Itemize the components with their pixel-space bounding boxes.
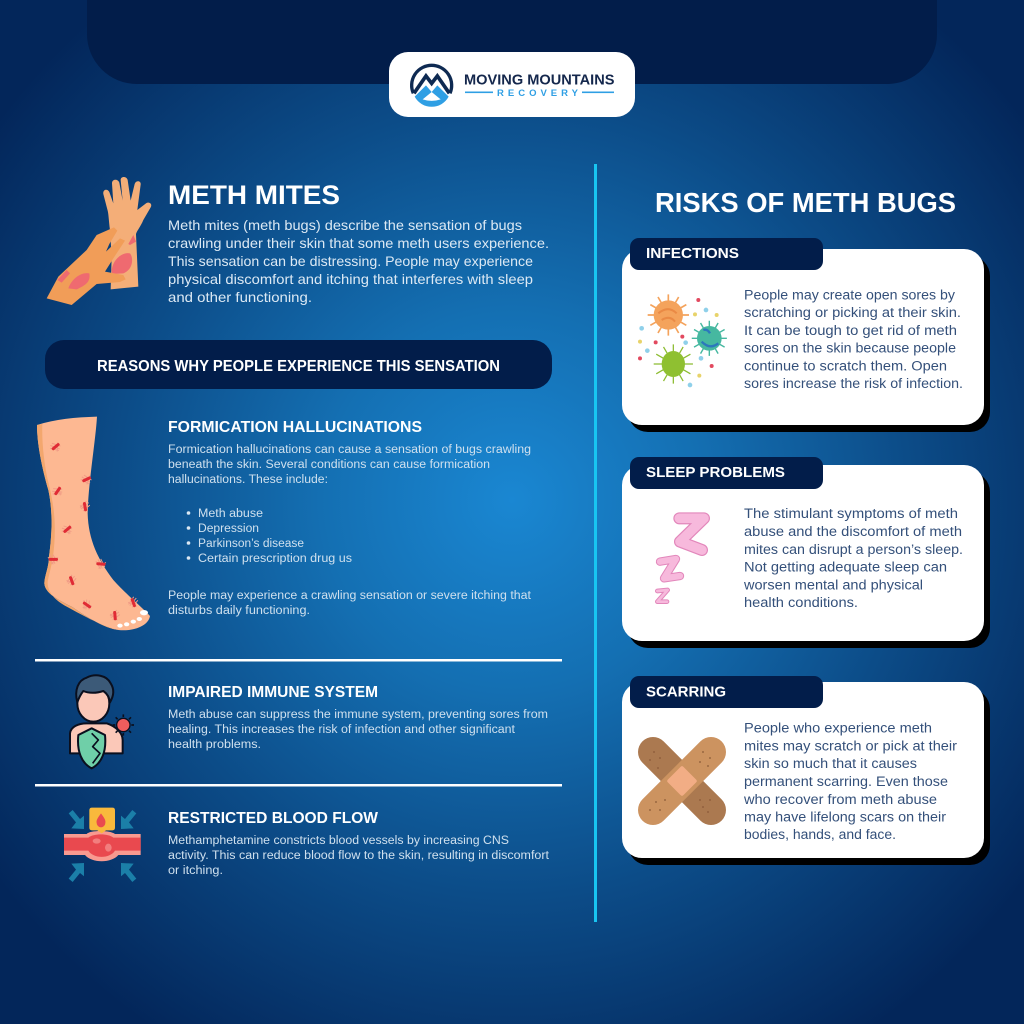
logo wordmark (464, 72, 614, 99)
section: restricted blood flow: activity. This can reduce blood flow to the skin, resulting in discomfort (168, 850, 550, 862)
intro text block: physical discomfort and itching that interferes with sleep (168, 271, 533, 287)
section: impaired immune system: healing. This increases the risk of infection and other significant (168, 724, 516, 736)
panel: sleep problems: SLEEP PROBLEMS (646, 464, 785, 481)
intro text block: and other functioning. (168, 289, 312, 305)
panel: infections (622, 238, 990, 432)
panel: scarring: bodies, hands, and face. (744, 827, 896, 842)
panel: scarring: may have lifelong scars on their (744, 810, 947, 824)
bullet list: Meth abuse (198, 508, 263, 520)
section: restricted blood flow: or itching. (168, 865, 223, 877)
section: formication: beneath the skin. Several conditions can cause formication (168, 459, 490, 471)
panel: infections: People may create open sores by (744, 288, 955, 302)
section: impaired immune system: Meth abuse can suppress the immune system, preventing sores from (168, 709, 548, 721)
panel: scarring: mites may scratch or pick at their (744, 738, 958, 754)
panel: sleep problems (622, 457, 990, 648)
intro text block: crawling under their skin that some meth users experience. (168, 235, 549, 251)
panel: infections: sores on the skin because people (744, 340, 956, 356)
panel: sleep problems: Not getting adequate sleep can (744, 560, 947, 574)
icon: mountain logo (412, 65, 452, 107)
icon: leg with bugs (37, 417, 150, 630)
icon: blood vessel (64, 808, 141, 882)
logo wordmark: RECOVERY (497, 88, 579, 99)
panel: scarring: People who experience meth (744, 720, 932, 736)
section: formication: People may experience a crawling sensation or severe itching that (168, 590, 532, 602)
header tab (87, 0, 937, 84)
panel: sleep problems: abuse and the discomfort of meth (744, 524, 962, 539)
panel: infections: scratching or picking at their skin. (744, 305, 961, 320)
section: formication: hallucinations. These include: (168, 474, 328, 486)
panel: infections: INFECTIONS (646, 245, 739, 262)
panel: scarring: skin so much that it causes (744, 756, 917, 771)
intro text block: This sensation can be distressing. People may experience (168, 253, 533, 269)
bullet list: Depression (198, 523, 259, 535)
section: impaired immune system (168, 684, 548, 751)
section: restricted blood flow (168, 810, 550, 877)
panel: sleep problems: The stimulant symptoms of meth (744, 506, 958, 521)
icon: crossed bandages (632, 731, 732, 831)
intro text block: Meth mites (meth bugs) describe the sensation of bugs (168, 217, 522, 233)
logo wordmark: MOVING MOUNTAINS (464, 72, 614, 88)
panel: scarring: SCARRING (646, 684, 726, 700)
center divider (594, 164, 597, 922)
icon: zzz (657, 518, 704, 602)
banner: reasons (45, 340, 552, 389)
bullet list: Certain prescription drug us (198, 553, 352, 565)
panel: infections: It can be tough to get rid of meth (744, 323, 957, 338)
logo card (389, 52, 635, 117)
icon: immune system (70, 675, 134, 768)
section: impaired immune system: health problems. (168, 739, 261, 751)
section: restricted blood flow: RESTRICTED BLOOD FLOW (168, 810, 378, 827)
icon: hands with rash (47, 177, 151, 305)
title: Meth Mites: METH MITES (168, 180, 340, 210)
bullet list (187, 508, 352, 565)
section: restricted blood flow: Methamphetamine constricts blood vessels by increasing CNS (168, 835, 509, 847)
panel: sleep problems: mites can disrupt a person’s sleep. (744, 542, 963, 557)
intro text block (168, 217, 549, 305)
icon: viruses (638, 294, 727, 387)
section: formication: FORMICATION HALLUCINATIONS (168, 419, 422, 436)
panel: scarring (622, 676, 990, 865)
section: formication (168, 419, 532, 617)
panel: sleep problems: worsen mental and physical (743, 578, 923, 592)
panel: scarring: who recover from meth abuse (743, 792, 937, 807)
bullet list: Parkinson’s disease (198, 538, 304, 550)
section: formication: Formication hallucinations can cause a sensation of bugs crawling (168, 444, 531, 456)
panel: scarring: permanent scarring. Even those (744, 774, 948, 789)
panel: sleep problems: health conditions. (744, 595, 858, 610)
section: formication: disturbs daily functioning. (168, 605, 310, 617)
banner: reasons: REASONS WHY PEOPLE EXPERIENCE THIS SENSATION (97, 358, 500, 375)
title: risks: RISKS OF METH BUGS (655, 187, 956, 218)
panel: infections: continue to scratch them. Open (744, 358, 947, 374)
section: impaired immune system: IMPAIRED IMMUNE SYSTEM (168, 684, 378, 701)
panel: infections: sores increase the risk of infection. (744, 376, 963, 391)
